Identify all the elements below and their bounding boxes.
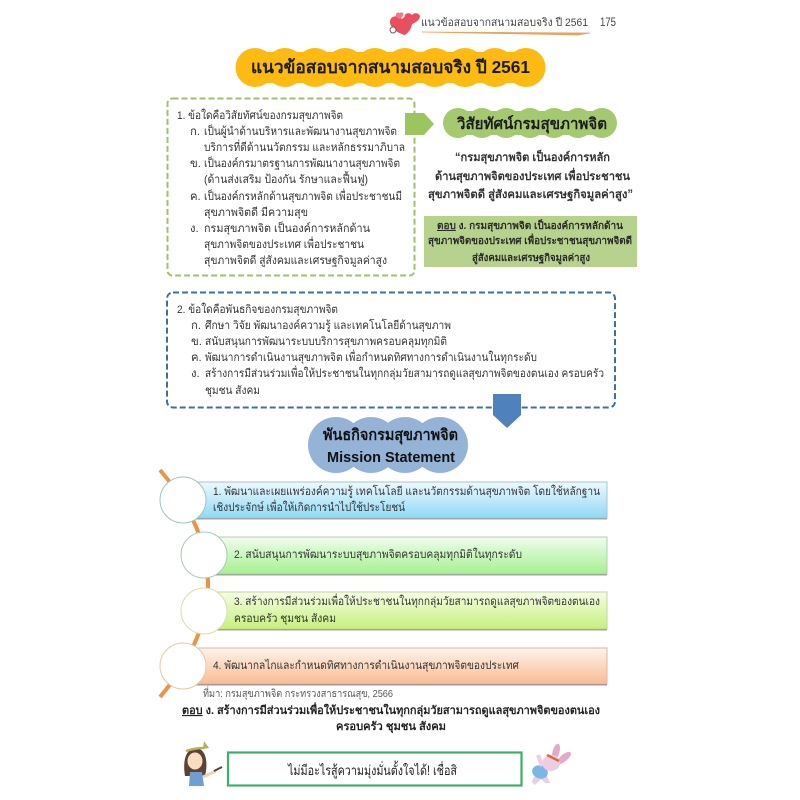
panel: question 1: เป็นผู้นำด้านบริหารและพัฒนางานสุขภาพจิต (204, 123, 397, 138)
panel: question 2: ก. (191, 320, 201, 332)
page number: 175 (600, 17, 616, 29)
answer 2: ครอบครัว ชุมชน สังคม (336, 720, 446, 734)
answer box 1: ตอบ ง. กรมสุขภาพจิต เป็นองค์การหลักด้าน (437, 218, 623, 232)
panel: question 1: สุขภาพจิตดี มีความสุข (204, 206, 308, 219)
answer 2: ตอบ ง. สร้างการมีส่วนร่วมเพื่อให้ประชาชนในทุกกลุ่มวัยสามารถดูแลสุขภาพจิตของตนเอง (182, 702, 600, 718)
mission item 2 (181, 532, 607, 578)
panel: question 2: สนับสนุนการพัฒนาระบบบริการสุขภาพครอบคลุมทุกมิติ (205, 336, 447, 348)
panel: question 1: 1. ข้อใดคือวิสัยทัศน์ของกรมสุขภาพจิต (177, 108, 343, 122)
title banner: แนวข้อสอบจากสนามสอบจริง ปี 2561 (251, 57, 530, 77)
arrow: blue down (493, 394, 521, 428)
vision quote (428, 149, 633, 202)
panel: question 1: กรมสุขภาพจิต เป็นองค์การหลักด้าน (204, 220, 370, 235)
mission item 1 (160, 477, 607, 523)
panel: question 1 (168, 98, 414, 276)
answer box 1: สู่สังคมและเศรษฐกิจมูลค่าสูง (472, 252, 590, 265)
underline (422, 32, 590, 35)
panel: question 1: สุขภาพจิตดี สู่สังคมและเศรษฐกิจมูลค่าสูง (204, 254, 387, 267)
answer box 1: สุขภาพจิตของประเทศ เพื่อประชาชนสุขภาพจิตดี (428, 233, 632, 247)
mission heading cloud: Mission Statement (327, 449, 455, 466)
mission item 4 (160, 643, 607, 689)
answer box 1 (424, 216, 637, 267)
panel: question 1: สุขภาพจิตของประเทศ เพื่อประชาชน (204, 236, 364, 251)
title banner (236, 48, 546, 87)
mission item 2: 2. สนับสนุนการพัฒนาระบบสุขภาพจิตครอบคลุมทุกมิติในทุกระดับ (234, 548, 522, 561)
panel: question 1: เป็นองค์กรมาตรฐานการพัฒนางานสุขภาพจิต (204, 155, 400, 170)
vision quote: “กรมสุขภาพจิต เป็นองค์การหลัก (455, 149, 610, 165)
panel: question 1: ง. (190, 223, 199, 235)
icon: bunny character (530, 743, 573, 785)
panel: question 2: พัฒนาการดำเนินงานสุขภาพจิต เพื่อกำหนดทิศทางการดำเนินงานในทุกระดับ (205, 349, 537, 364)
panel: question 1: ก. (190, 126, 200, 138)
vision heading pill (443, 108, 617, 138)
mission item 3: ครอบครัว ชุมชน สังคม (234, 613, 336, 625)
mission item 1: 1. พัฒนาและเผยแพร่องค์ความรู้ เทคโนโลยี และนวัตกรรมด้านสุขภาพจิต โดยใช้หลักฐาน (213, 484, 600, 498)
mission item 4: 4. พัฒนากลไกและกำหนดทิศทางการดำเนินงานสุขภาพจิตของประเทศ (213, 659, 520, 672)
panel: question 2: ศึกษา วิจัย พัฒนาองค์ความรู้ และเทคโนโลยีด้านสุขภาพ (205, 318, 451, 332)
motivational quote box (228, 752, 522, 786)
arrow: green to vision (405, 113, 434, 135)
mission heading cloud (308, 417, 468, 473)
panel: question 1: เป็นองค์กรหลักด้านสุขภาพจิต เพื่อประชาชนมี (204, 188, 402, 203)
mission heading cloud: พันธกิจกรมสุขภาพจิต (323, 426, 458, 445)
panel: question 1: (ด้านส่งเสริม ป้องกัน รักษาและฟื้นฟู) (204, 171, 368, 186)
panel: question 2: ชุมชน สังคม (205, 385, 260, 397)
panel: question 2: ค. (191, 352, 202, 364)
mission item 3 (181, 588, 607, 634)
panel: question 1: ค. (190, 191, 201, 203)
running title text: แนวข้อสอบจากสนามสอบจริง ปี 2561 (421, 16, 588, 29)
icon: hearts (390, 12, 420, 35)
source note: ที่มา: กรมสุขภาพจิต กระทรวงสาธารณสุข, 2566 (203, 686, 393, 700)
panel: question 2: สร้างการมีส่วนร่วมเพื่อให้ประชาชนในทุกกลุ่มวัยสามารถดูแลสุขภาพจิตของตนเอง ครอบครัว (205, 365, 604, 380)
panel: question 1: บริการที่ดีด้านนวัตกรรม และหลักธรรมาภิบาล (204, 139, 405, 154)
panel: question 2: ข. (191, 336, 202, 348)
vision quote: ด้านสุขภาพจิตของประเทศ เพื่อประชาชน (435, 167, 630, 184)
answer 2 (182, 702, 600, 734)
icon: girl character (184, 741, 222, 786)
motivational quote box: ไม่มีอะไรสู้ความมุ่งมั่นตั้งใจได้! เชื่อสิ (287, 760, 457, 779)
panel: question 1: ข. (190, 158, 201, 170)
vision heading pill: วิสัยทัศน์กรมสุขภาพจิต (457, 115, 607, 134)
orange arc connector (160, 470, 208, 697)
header: running title (390, 12, 616, 35)
panel: question 2: 2. ข้อใดคือพันธกิจของกรมสุขภาพจิต (177, 303, 338, 316)
vision quote: สุขภาพจิตดี สู่สังคมและเศรษฐกิจมูลค่าสูง” (428, 188, 633, 202)
panel: question 2 (167, 292, 615, 408)
mission item 1: เชิงประจักษ์ เพื่อให้เกิดการนำไปใช้ประโยชน์ (213, 499, 405, 514)
mission item 3: 3. สร้างการมีส่วนร่วมเพื่อให้ประชาชนในทุกกลุ่มวัยสามารถดูแลสุขภาพจิตของตนเอง (234, 593, 600, 608)
panel: question 2: ง. (191, 368, 200, 380)
